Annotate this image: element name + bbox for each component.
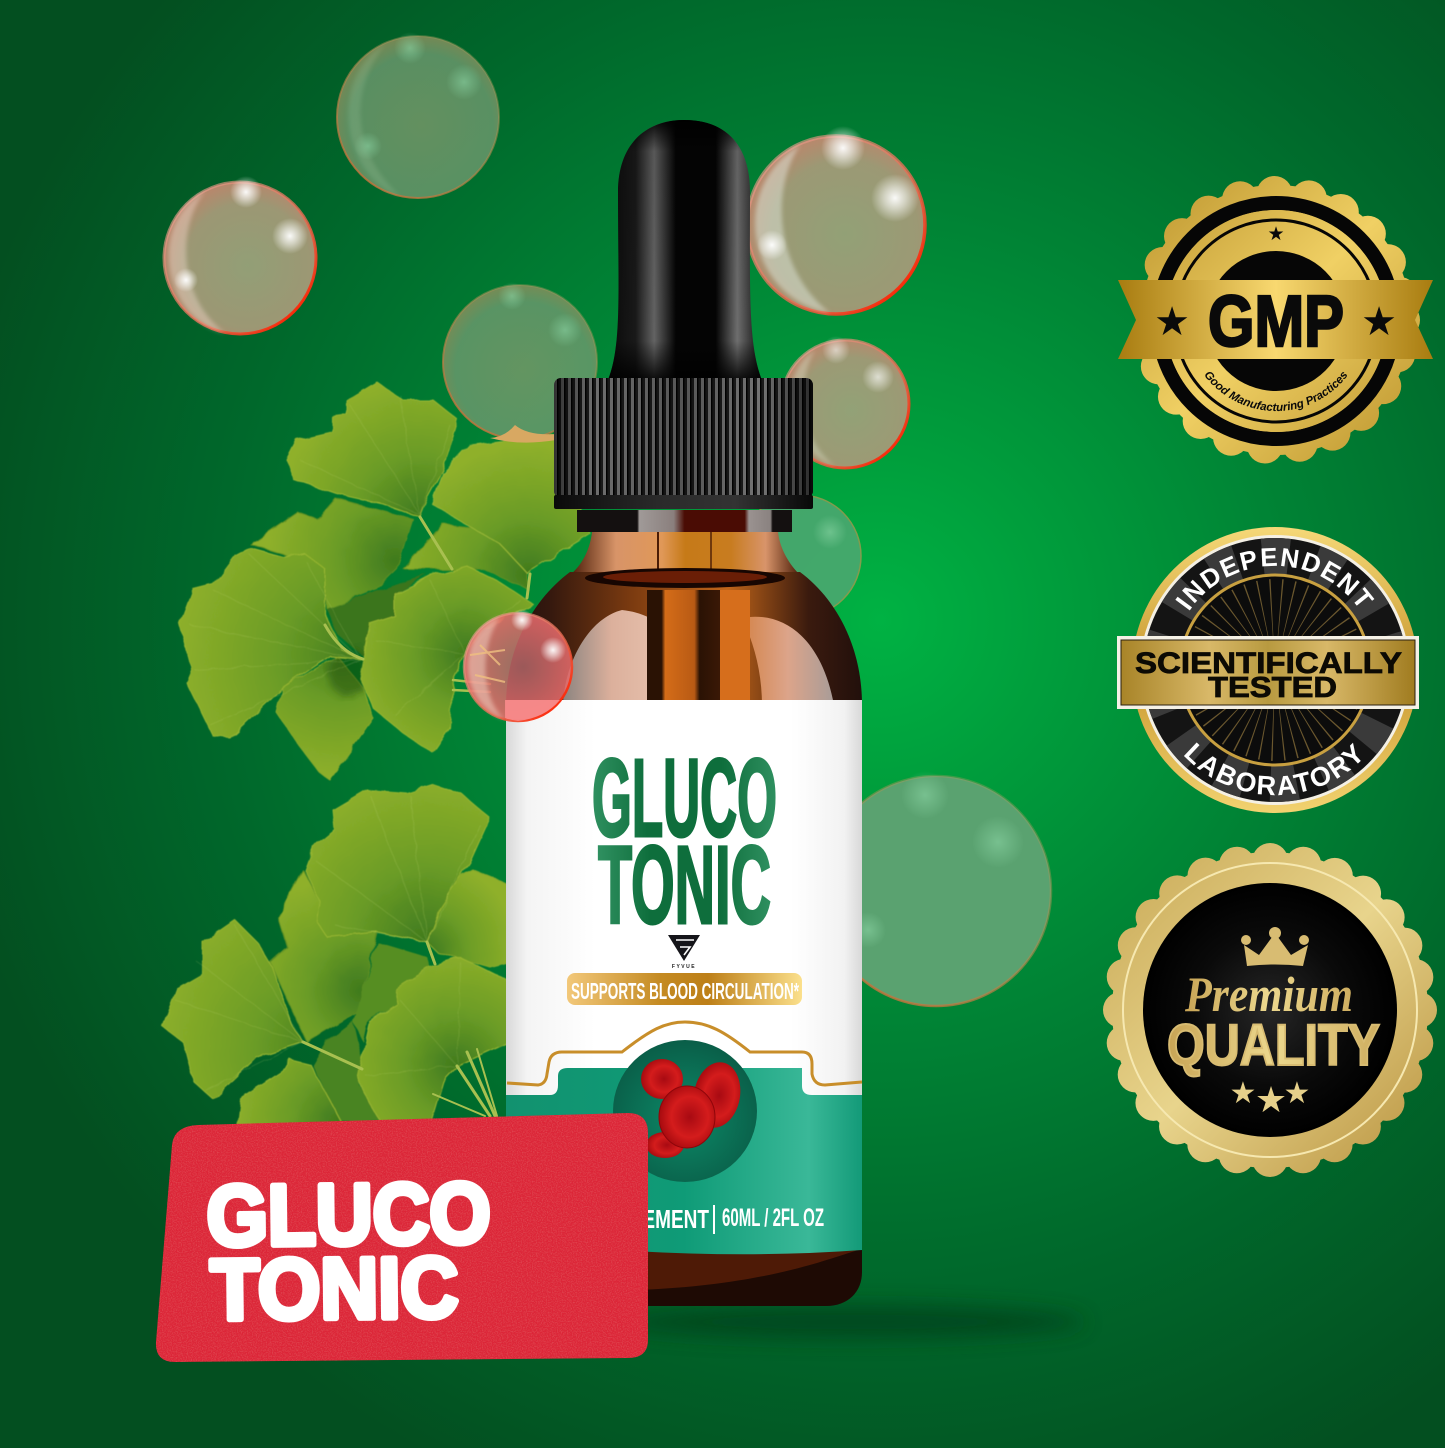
bubble: behind neck [739, 495, 861, 617]
card title: TONIC [210, 1240, 459, 1338]
bubble: red over bottle [464, 609, 572, 721]
claim pill: SUPPORTS BLOOD CIRCULATION* [571, 978, 799, 1004]
bubble: right small [781, 336, 909, 468]
badge: scientifically tested: INDEPENDENT [1175, 548, 1374, 610]
badge: scientifically tested [1117, 527, 1419, 813]
badge: premium quality: Premium [1184, 966, 1353, 1022]
badge: premium quality [1112, 852, 1428, 1168]
bottle base [506, 1235, 862, 1306]
ginkgo leaves: upper cluster [180, 382, 590, 780]
product bottle [506, 120, 862, 1306]
brand logo: FYVUE [672, 964, 696, 970]
GMP ribbon: GMP [1208, 282, 1344, 362]
badge: GMP [1118, 176, 1433, 464]
red brand card [156, 1113, 648, 1362]
GMP ribbon [1118, 280, 1433, 362]
leaf stems: upper cluster [325, 517, 530, 692]
blood cell circle [613, 1040, 757, 1182]
teal label band [506, 1068, 862, 1254]
tested banner [1117, 636, 1419, 709]
card title: GLUCO [206, 1166, 491, 1264]
base amber glow [620, 1250, 858, 1290]
bubble: left reddish [164, 176, 316, 334]
white label [506, 700, 862, 1100]
floor shadow [615, 1305, 1085, 1339]
GMP ribbon: ★ [1361, 299, 1397, 345]
glass neck [570, 510, 800, 575]
bubble: top green [337, 32, 499, 198]
card title [206, 1166, 492, 1338]
icon: three stars: ★ [1284, 1077, 1310, 1110]
badge: premium quality: QUALITY [1167, 1013, 1380, 1078]
brand logo [668, 935, 700, 970]
badge: scientifically tested: LABORATORY [1184, 742, 1361, 796]
leaf stems: lower cluster [303, 942, 497, 1116]
badge: GMP: Good Manufacturing Practices [1205, 372, 1347, 412]
icon: three stars: ★ [1230, 1077, 1256, 1110]
icon: three stars [1230, 1077, 1310, 1120]
bubble: upper right reddish [747, 126, 925, 314]
amber shoulder [506, 568, 862, 705]
GMP ribbon: ★ [1154, 299, 1190, 345]
icon: three stars: ★ [1255, 1079, 1287, 1120]
ribbed cap [554, 378, 813, 509]
ginkgo leaves: lower cluster [163, 785, 510, 1125]
product name: TONIC [598, 824, 771, 947]
claim pill [567, 973, 802, 1005]
badge: GMP: ★ [1267, 223, 1285, 245]
product name [592, 737, 777, 947]
tested banner: SCIENTIFICALLY [1135, 647, 1402, 680]
bubble: mid green [443, 282, 597, 439]
bubble: large lower right [821, 771, 1051, 1006]
gold label line [507, 1022, 862, 1085]
size line: 60ML / 2FL OZ [722, 1204, 824, 1232]
dropper bulb [608, 120, 762, 380]
size line: SUPPLEMENT [579, 1204, 709, 1234]
product bottle: GLUCO [592, 737, 777, 860]
icon: crown [1241, 927, 1309, 966]
tested banner: TESTED [1208, 672, 1337, 704]
bubble sliver over leaf [490, 425, 556, 443]
